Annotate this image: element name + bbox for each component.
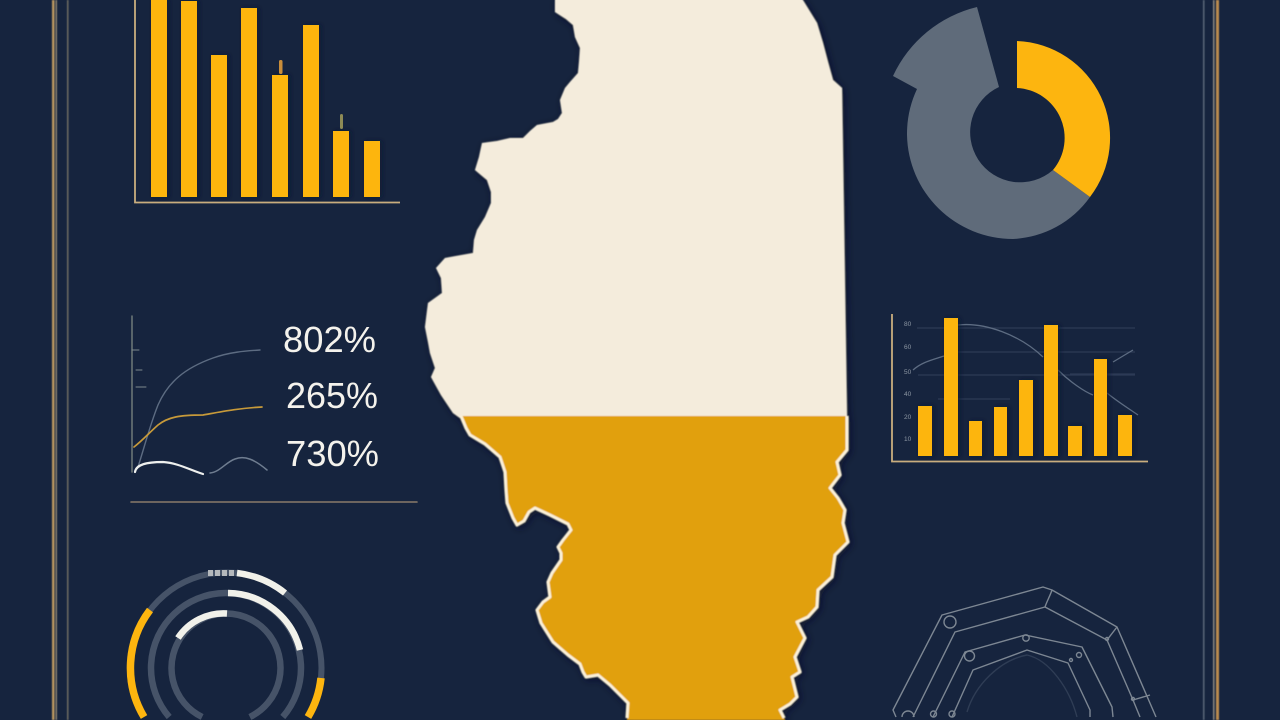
- decorative frame: left: [52, 0, 68, 720]
- axes: [135, 0, 400, 202]
- innermost faint ring: [967, 655, 1077, 717]
- radial progress rings: [130, 572, 322, 717]
- line: blue gray: [138, 350, 260, 467]
- decorative frame: right: [1203, 0, 1219, 720]
- divider above polygon diagram: [892, 527, 1092, 529]
- percentage figures: [283, 319, 379, 474]
- second band: [933, 635, 1113, 717]
- ring top marks: [208, 570, 235, 576]
- bars: [151, 0, 380, 197]
- line: white: [135, 462, 203, 474]
- map: gold southern region: [461, 416, 848, 720]
- line: faded continuation: [210, 458, 267, 473]
- bar markers: [279, 60, 343, 129]
- figure three: 730%: [286, 433, 379, 474]
- axes: [131, 316, 417, 502]
- polygon ring diagram: [893, 587, 1156, 717]
- axis tick labels: 40: [904, 391, 912, 398]
- axis tick labels: 10: [904, 436, 912, 443]
- line: gold: [134, 407, 262, 447]
- donut: gold segment: [1017, 41, 1110, 197]
- figure one: 802%: [283, 319, 376, 360]
- ring tracks: [131, 572, 322, 717]
- bar chart: top left: [135, 0, 400, 202]
- third band: [952, 650, 1090, 717]
- map: cream northern region: [425, 0, 847, 418]
- donut chart: [893, 7, 1110, 239]
- outer band inner edge: [913, 607, 1140, 717]
- combo chart: middle right: [892, 314, 1148, 462]
- outer band: [893, 587, 1156, 717]
- band separators: [1045, 590, 1150, 700]
- axis tick labels: 20: [904, 414, 912, 421]
- node circles: [902, 616, 1134, 717]
- white arcs: [178, 573, 300, 650]
- grid lines: [917, 328, 1135, 399]
- axis tick labels: 50: [904, 369, 912, 376]
- axes: [892, 314, 1148, 462]
- trend line: [913, 325, 1138, 415]
- axis tick labels: 60: [904, 344, 912, 351]
- bars: [918, 318, 1132, 456]
- donut: gray segment: [893, 7, 1090, 239]
- figure two: 265%: [286, 375, 378, 416]
- map of Illinois: [425, 0, 848, 720]
- line chart: middle left: [131, 316, 417, 502]
- gold arcs: [130, 610, 321, 717]
- axis tick labels: [904, 321, 912, 443]
- axis tick labels: 80: [904, 321, 912, 328]
